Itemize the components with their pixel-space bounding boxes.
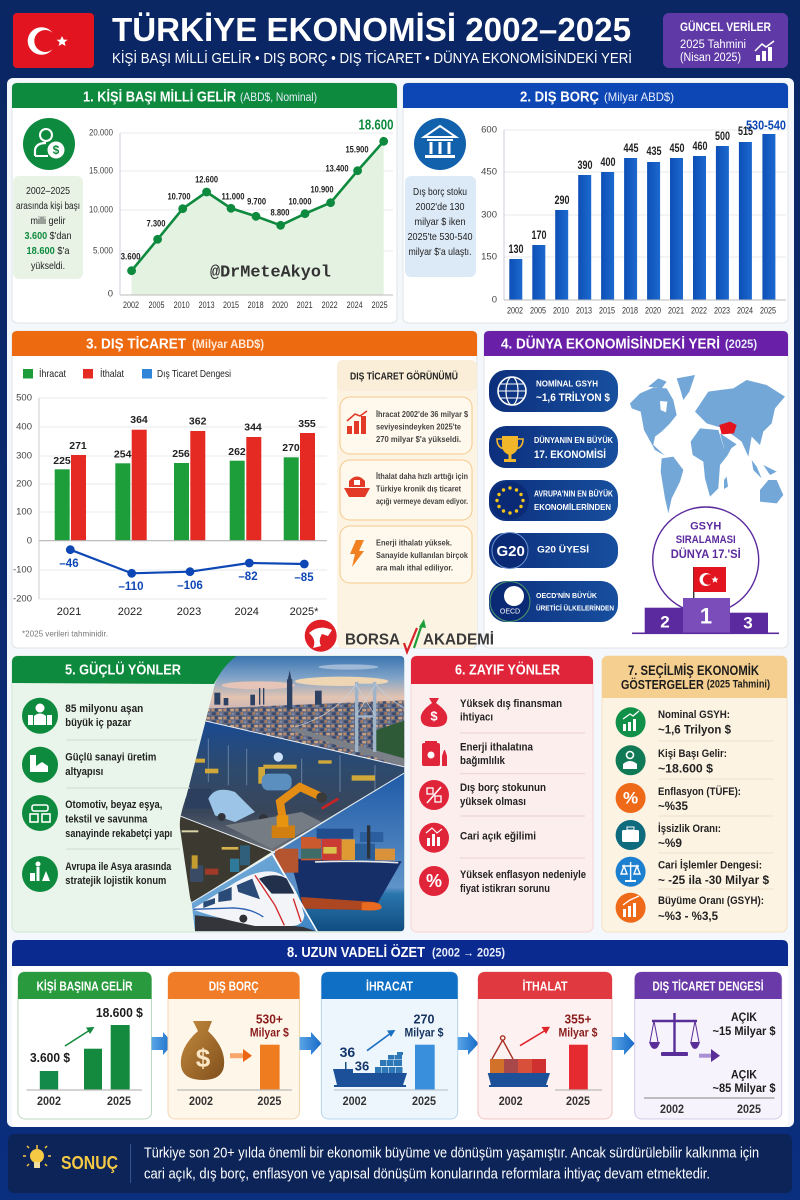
combo chart: trade: 100 (16, 506, 32, 518)
heading 2: 2. DIŞ BORÇ (520, 88, 599, 106)
conclusion bar (8, 1134, 792, 1193)
indicator: unemployment: İşsizlik Oranı: (658, 822, 721, 835)
heading 3 unit: (Milyar ABD$) (192, 337, 264, 351)
heading 7: GÖSTERGELER (2025 Tahmini) (621, 677, 770, 692)
combo chart: trade: 271 (69, 440, 87, 452)
bar chart: debt: 515 (738, 126, 753, 138)
summary card: income: 3.600 $ (30, 1051, 70, 1065)
pill: nominal GDP: ~1,6 TRİLYON $ (536, 391, 610, 404)
indicator: nominal GDP: Nominal GSYH: (658, 709, 730, 721)
bar chart: debt: 2023 (714, 306, 730, 316)
bar chart: debt: 2013 (576, 306, 592, 316)
debt summary text box: Dış borç stoku (413, 186, 467, 198)
summary card: debt: Milyar $ (250, 1026, 289, 1040)
bar chart: debt: 170 (532, 230, 546, 242)
combo chart: trade: 225 (53, 455, 71, 467)
pill: OECD: ÜRETİCİ ÜLKELERİNDEN (536, 604, 614, 612)
icon: light bulb (23, 1145, 51, 1168)
summary card: debt: 2025 (257, 1096, 282, 1108)
bar chart: debt (481, 118, 786, 316)
summary card: income: 2025 (107, 1096, 132, 1108)
pill: European economies: EKONOMİLERİNDEN (534, 502, 611, 512)
line chart: income: 2020 (272, 300, 288, 311)
summary card: income: KİŞİ BAŞINA GELİR (36, 978, 133, 994)
line chart: income: 2025 (372, 300, 388, 311)
bar chart: debt: 2010 (553, 306, 569, 316)
income summary text box (13, 176, 83, 279)
bar chart: debt: 290 (554, 195, 570, 207)
combo chart: trade: 2024 (234, 606, 259, 618)
line chart: income: 2005 (148, 300, 164, 311)
collage: robotic factory (178, 721, 405, 852)
summary card: income: 2002 (37, 1096, 61, 1108)
strength 3: competitive sectors: tekstil ve savunma (65, 814, 148, 826)
combo chart: trade: 500 (16, 392, 32, 404)
trade outlook sidebar (337, 360, 477, 648)
summary card: income (18, 972, 152, 1119)
conclusion text (144, 1144, 759, 1182)
summary card: debt: $ (196, 1043, 211, 1073)
pill: G20 (489, 532, 618, 568)
GDP ranking circle (653, 507, 759, 613)
line chart: income: 11.000 (222, 192, 244, 202)
summary card: debt: DIŞ BORÇ (209, 978, 259, 994)
line chart: income: 0 (108, 288, 113, 300)
strength 1: domestic market (22, 698, 144, 734)
summary card: debt: 530+ (256, 1012, 283, 1026)
outlook card: energy: Enerji ithalatı yüksek. (376, 537, 452, 547)
collage: cargo ship (273, 773, 405, 932)
income summary text box: 3.600 $'dan (24, 230, 72, 242)
outlook card: imports: Türkiye kronik dış ticaret (376, 484, 461, 494)
panel 8: long-term summary (12, 940, 788, 1127)
indicator: unemployment (616, 820, 721, 850)
panel 2: external debt (403, 83, 788, 323)
combo chart: trade: 400 (16, 422, 32, 432)
header badge: current data: GÜNCEL VERİLER (680, 19, 771, 34)
summary card: income: 18.600 $ (96, 1006, 143, 1020)
weakness 3: debt stock: yüksek olması (460, 796, 526, 808)
outlook card: exports (340, 397, 472, 454)
combo chart: trade: 2023 (177, 606, 201, 618)
bar chart: debt: 600 (481, 124, 497, 136)
weakness 2: energy import (422, 741, 534, 767)
arrow: income to debt (152, 1032, 173, 1055)
heading 5: 5. GÜÇLÜ YÖNLER (65, 662, 181, 678)
combo chart: trade: 254 (114, 449, 132, 461)
pill: European economies: AVRUPA'NIN EN BÜYÜK (534, 490, 613, 498)
weakness 2: energy import: Enerji ithalatına (460, 741, 534, 753)
summary card: exports: 36 (340, 1044, 355, 1060)
debt summary text box: 2025'te 530-540 (408, 231, 473, 243)
summary card: exports: Milyar $ (404, 1026, 444, 1040)
GDP ranking circle: DÜNYA 17.'Sİ (671, 548, 741, 561)
summary card: trade balance: 2002 (660, 1104, 684, 1116)
strength 4: logistics position: stratejik lojistik konum (65, 875, 166, 887)
strength 3: competitive sectors (22, 795, 172, 840)
icon: person with dollar: $ (53, 143, 60, 157)
heading 6: 6. ZAYIF YÖNLER (455, 662, 560, 678)
line chart: income: 18.600 (358, 116, 394, 134)
conclusion label: SONUÇ (61, 1153, 118, 1173)
summary card: imports: 355+ (564, 1012, 592, 1026)
weakness 1: external financing (421, 698, 562, 727)
header badge: current data: (Nisan 2025) (680, 52, 741, 64)
line chart: income: 2010 (174, 300, 190, 311)
line chart: income: 5.000 (93, 246, 113, 256)
line chart: income: 2018 (248, 300, 264, 311)
arrow: debt to exports (300, 1032, 321, 1055)
legend: Dış Ticaret Dengesi (157, 368, 231, 380)
combo chart: trade: –106 (177, 580, 203, 592)
combo chart: trade: –46 (59, 558, 79, 570)
line chart: income: 7.300 (146, 218, 166, 230)
legend (23, 367, 231, 380)
income summary text box: 18.600 $'a (26, 245, 70, 257)
summary card: imports (478, 972, 612, 1119)
panel 7: selected indicators (602, 656, 787, 932)
combo chart: trade: 2022 (118, 606, 142, 618)
strength 3: competitive sectors: Otomotiv, beyaz eşya, (65, 799, 162, 811)
title: TÜRKİYE EKONOMİSİ 2002–2025 (112, 11, 631, 48)
pill: European economies (489, 480, 618, 521)
heading 3: 3. DIŞ TİCARET (86, 336, 186, 352)
panel 3: foreign trade (12, 331, 477, 648)
line chart: income: 3.600 (121, 252, 141, 262)
pill: 17th largest (489, 426, 618, 468)
bar chart: debt: 130 (508, 244, 524, 256)
pill: 17th largest: 17. EKONOMİSİ (534, 448, 606, 461)
arrow: imports to trade balance (612, 1032, 635, 1055)
bar chart: debt: 400 (600, 157, 616, 169)
pill: G20: G20 (497, 543, 525, 560)
strength 2: industrial base: Güçlü sanayi üretim (65, 752, 156, 764)
strength 4: logistics position: Avrupa ile Asya arasında (65, 861, 172, 873)
watermark: @DrMeteAkyol (210, 262, 331, 282)
summary card: imports: İTHALAT (522, 978, 568, 994)
weakness 1: external financing: $ (430, 708, 438, 724)
indicator: current account: ~ -25 ila -30 Milyar $ (658, 873, 769, 887)
debt summary text box (405, 176, 476, 277)
line chart: income: 10.000 (89, 204, 113, 216)
collage: high-speed train (192, 854, 318, 932)
summary card: imports: 2002 (499, 1096, 523, 1108)
line chart: income: 10.700 (168, 192, 190, 202)
logo: Borsa Akademi: BORSA (345, 632, 400, 648)
bar chart: debt: 2025 (760, 306, 776, 316)
panel 6: weaknesses (411, 656, 593, 932)
summary card: debt (168, 972, 300, 1119)
bar chart: debt: 435 (646, 146, 662, 158)
outlook card: imports (340, 460, 472, 520)
collage: Istanbul city and bridge (205, 656, 404, 767)
weakness 3: debt stock: Dış borç stokunun (460, 782, 546, 794)
collage: factory interior (178, 815, 272, 903)
world map with Türkiye highlighted (630, 375, 785, 513)
line chart: income: 12.600 (195, 174, 218, 186)
indicator: per capita income: ~18.600 $ (658, 762, 713, 776)
podium with flag: 1 (700, 604, 712, 628)
line chart: income: 2022 (322, 300, 338, 311)
combo chart: trade: 344 (244, 422, 262, 434)
weakness 3: debt stock (419, 780, 546, 810)
combo chart: trade: –110 (119, 581, 143, 593)
strength 2: industrial base: altyapısı (65, 766, 103, 778)
indicator: growth rate: ~%3 - %3,5 (658, 909, 718, 923)
debt summary text box: 2002'de 130 (416, 201, 465, 213)
icon: person with dollar (23, 118, 75, 170)
footnote: *2025 verileri tahminidir. (22, 630, 108, 638)
line chart: income: 10.900 (310, 184, 334, 196)
legend: İthalat (100, 367, 124, 380)
pill: G20: G20 ÜYESİ (537, 544, 589, 556)
bar chart: debt: 2018 (622, 306, 638, 316)
indicator: per capita income: Kişi Başı Gelir: (658, 748, 727, 760)
line chart: income: 9.700 (247, 196, 266, 208)
combo chart: trade: -200 (13, 594, 32, 604)
weakness 5: inflation (419, 866, 586, 896)
bar chart: debt: 0 (492, 294, 497, 306)
bar chart: debt: 300 (481, 210, 497, 220)
outlook card: energy (340, 526, 472, 583)
bar chart: debt: 460 (692, 141, 708, 153)
summary card: exports: 270 (414, 1012, 434, 1026)
heading 4 year: (2025) (725, 337, 757, 351)
subtitle: KİŞİ BAŞI MİLLİ GELİR • DIŞ BORÇ • DIŞ TİCARET • DÜNYA EKONOMİSİNDEKİ YERİ (112, 49, 632, 67)
combo chart: trade: –85 (294, 572, 314, 584)
combo chart: trade: 355 (298, 418, 316, 430)
indicator: current account (616, 857, 769, 887)
trade outlook sidebar: DIŞ TİCARET GÖRÜNÜMÜ (350, 370, 458, 382)
outlook card: exports: İhracat 2002'de 36 milyar $ (376, 409, 468, 419)
logo: Borsa Akademi: AKADEMİ (423, 632, 494, 648)
line chart: income: 2002 (123, 300, 139, 311)
bar chart: debt: 2020 (645, 306, 661, 316)
line chart: income (89, 116, 394, 311)
combo chart: trade: 362 (189, 416, 207, 428)
weakness 1: external financing: ihtiyacı (460, 712, 493, 724)
GDP ranking circle: SIRALAMASI (676, 534, 736, 546)
heading 2 unit: (Milyar ABD$) (604, 90, 674, 104)
bar chart: debt: 2021 (668, 306, 684, 316)
header badge: current data: 2025 Tahmini (680, 39, 746, 51)
summary card: trade balance: ~15 Milyar $ (712, 1024, 776, 1038)
summary card: imports: 2025 (566, 1096, 591, 1108)
bar chart: debt: 2024 (737, 306, 753, 316)
pill: OECD: OECD'NİN BÜYÜK (536, 591, 598, 600)
indicator: growth rate: Büyüme Oranı (GSYH): (658, 895, 764, 907)
indicator: current account: Cari İşlemler Dengesi: (658, 859, 762, 872)
outlook card: imports: İthalat daha hızlı arttığı için (376, 471, 468, 481)
bar chart: debt: 450 (670, 143, 684, 155)
bar chart: debt: 530-540 (746, 118, 786, 132)
line chart: income: 8.800 (270, 208, 290, 218)
outlook card: exports: seviyesindeyken 2025'te (376, 422, 461, 432)
indicator: inflation (616, 783, 741, 813)
summary card: exports: İHRACAT (366, 978, 413, 994)
arrow: exports to imports (458, 1032, 479, 1055)
pill: OECD: OECD (500, 608, 520, 616)
pill: OECD (489, 581, 618, 622)
line chart: income: 10.000 (288, 196, 312, 208)
weakness 4: current deficit (419, 823, 536, 853)
indicator: per capita income (616, 745, 727, 776)
strength 1: domestic market: büyük iç pazar (65, 717, 132, 729)
pill: nominal GDP: NOMİNAL GSYH (536, 380, 598, 388)
combo chart: trade: 262 (228, 446, 246, 458)
indicator: growth rate (616, 893, 764, 923)
indicator: unemployment: ~%9 (658, 836, 682, 850)
bar chart: debt: 390 (578, 160, 592, 172)
summary card: trade balance: 2025 (737, 1104, 762, 1116)
indicator: inflation: % (623, 788, 638, 808)
line chart: income: 20.000 (89, 128, 113, 138)
logo: Borsa Akademi (305, 619, 494, 652)
combo chart: trade: 270 (282, 442, 300, 454)
outlook card: energy: Sanayide kullanılan birçok (376, 550, 468, 560)
heading 8 range: (2002 → 2025) (432, 946, 505, 960)
combo chart: trade: 364 (130, 414, 148, 426)
combo chart: trade: 2021 (57, 606, 81, 618)
line chart: income: 13.400 (326, 164, 348, 174)
income summary text box: arasında kişi başı (16, 200, 80, 212)
combo chart: trade: 300 (16, 450, 32, 462)
strength 4: logistics position (22, 856, 172, 892)
weakness 4: current deficit: Cari açık eğilimi (460, 831, 536, 843)
legend: İhracat (39, 367, 66, 380)
weakness 2: energy import: bağımlılık (460, 755, 506, 767)
combo chart: trade: 256 (172, 448, 190, 460)
bar chart: debt: 2005 (530, 306, 546, 316)
header badge: current data (663, 13, 788, 68)
line chart: income: 15.000 (89, 166, 113, 176)
weakness 5: inflation: Yüksek enflasyon nedeniyle (460, 869, 586, 881)
heading 8: 8. UZUN VADELİ ÖZET (287, 944, 425, 961)
line chart: income: 2024 (347, 300, 363, 311)
indicator: inflation: Enflasyon (TÜFE): (658, 785, 741, 798)
summary card: trade balance: AÇIK (731, 1010, 757, 1024)
GDP ranking circle: GSYH (690, 521, 721, 533)
podium with flag: 2 (660, 612, 670, 632)
income summary text box: milli gelir (30, 215, 66, 227)
summary card: exports (321, 972, 458, 1119)
podium with flag (632, 567, 779, 634)
photo collage: city, factory, ship, train (175, 652, 408, 932)
bar chart: debt: 500 (715, 131, 730, 143)
conclusion text: cari açık, dış borç, enflasyon ve yapısal dönüşüm konularında reformlara ihtiyaç devam etmektedir. (144, 1166, 710, 1182)
heading 7: 7. SEÇİLMİŞ EKONOMİK (628, 662, 759, 678)
panel 5: strengths (12, 652, 408, 932)
indicator: nominal GDP: ~1,6 Trilyon $ (658, 723, 731, 737)
weakness 5: inflation: fiyat istikrarı sorunu (460, 883, 550, 895)
summary card: exports: 36 (355, 1058, 369, 1074)
heading 1 unit: (ABD$, Nominal) (240, 90, 317, 104)
indicator: nominal GDP (616, 707, 731, 737)
pill: nominal GDP (489, 370, 618, 412)
outlook card: imports: açığı vermeye devam ediyor. (376, 496, 468, 506)
summary card: exports: 2025 (412, 1096, 437, 1108)
indicator: inflation: ~%35 (658, 799, 688, 813)
heading 1: 1. KİŞİ BAŞI MİLLİ GELİR (83, 88, 236, 106)
summary card: trade balance: DIŞ TİCARET DENGESİ (652, 978, 764, 994)
panel 4: place in world economy (484, 331, 788, 648)
debt summary text box: milyar $ iken (414, 216, 466, 228)
debt summary text box: milyar $'a ulaştı. (408, 246, 472, 258)
panel 1: per capita income (12, 83, 397, 323)
outlook card: exports: 270 milyar $'a yükseldi. (376, 434, 461, 444)
strength 3: competitive sectors: sanayinde rekabetçi yapı (65, 828, 172, 840)
summary card: trade balance: AÇIK (731, 1067, 757, 1081)
combo chart: trade: 0 (27, 536, 32, 546)
income summary text box: 2002–2025 (26, 185, 70, 197)
bar chart: debt: 450 (481, 166, 497, 178)
line chart: income: 2015 (223, 300, 239, 311)
summary card: imports: Milyar $ (558, 1026, 598, 1040)
line chart: income: 2013 (199, 300, 215, 311)
bar chart: debt: 2002 (507, 306, 523, 316)
income summary text box: yükseldi. (31, 260, 65, 272)
header: flag (13, 13, 94, 68)
summary card: debt: 2002 (189, 1096, 213, 1108)
outlook card: energy: ara malı ithal ediliyor. (376, 563, 453, 573)
weakness 1: external financing: Yüksek dış finansman (460, 698, 562, 710)
bar chart: debt: 2022 (691, 306, 707, 316)
bar chart: debt: 445 (624, 143, 639, 155)
combo chart: trade: 200 (16, 478, 32, 490)
bar chart: debt: 150 (481, 252, 497, 262)
podium with flag: 3 (743, 614, 753, 632)
combo chart: trade: –82 (238, 571, 258, 583)
summary card: trade balance (635, 972, 782, 1119)
line chart: income: 15.900 (346, 144, 368, 156)
pill: 17th largest: DÜNYANIN EN BÜYÜK (534, 436, 613, 445)
line chart: income: 2021 (297, 300, 313, 311)
combo chart: trade (13, 392, 327, 618)
strength 1: domestic market: 85 milyonu aşan (65, 703, 144, 715)
heading 7 (621, 662, 770, 692)
combo chart: trade: -100 (13, 564, 32, 576)
weakness 5: inflation: % (426, 871, 442, 891)
summary card: trade balance: ~85 Milyar $ (712, 1081, 776, 1095)
summary card: exports: 2002 (343, 1096, 367, 1108)
heading 4: 4. DÜNYA EKONOMİSİNDEKİ YERİ (501, 336, 720, 352)
combo chart: trade: 2025* (290, 606, 319, 618)
bar chart: debt: 2015 (599, 306, 615, 316)
strength 2: industrial base (22, 747, 156, 783)
icon: bank (414, 118, 466, 170)
